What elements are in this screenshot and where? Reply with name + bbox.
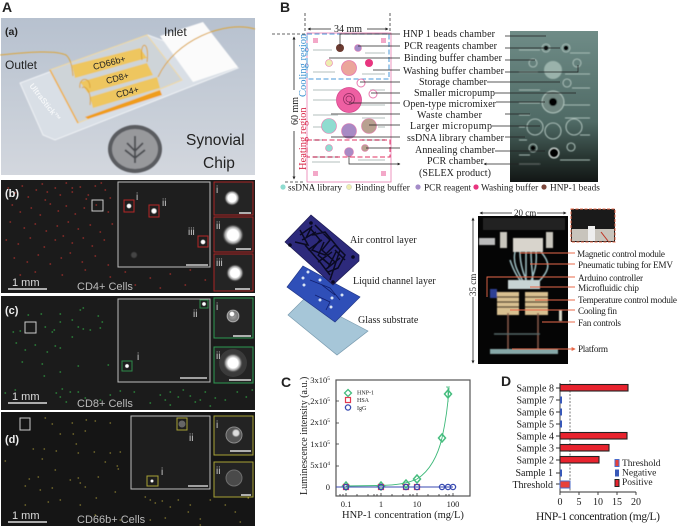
labels: inset callouts: ii <box>193 309 197 320</box>
panel: chip schematic <box>272 13 400 182</box>
label: (d): (d) <box>5 434 19 446</box>
labels: chamber names: Washing buffer chamber <box>403 66 505 77</box>
leader arrows to photo <box>484 36 578 164</box>
scale bar: 1 mm: 1 mm <box>12 510 40 522</box>
labels: chamber names <box>403 29 505 179</box>
dimension: 20 cm <box>480 208 566 218</box>
label: (b): (b) <box>5 188 19 200</box>
labels: chamber names: Storage chamber <box>419 77 488 88</box>
chart: luminescence intensity vs concentration <box>299 375 470 521</box>
labels: inset callouts: iii <box>188 227 195 238</box>
labels: inset callouts: ii <box>189 433 193 444</box>
panel label: D: D <box>501 373 511 389</box>
x tick labels: 0 <box>558 497 562 508</box>
legend: reagents: ssDNA library <box>288 184 342 194</box>
labels: chamber names: PCR chamber <box>427 156 485 167</box>
row labels: Sample 4 <box>516 432 554 442</box>
legend: IgG <box>357 406 367 412</box>
x axis tick labels: 10 <box>413 499 421 509</box>
dimension: 35 cm: 35 cm <box>468 274 478 296</box>
label: Synovial Chip: Chip <box>203 155 235 172</box>
dimension: 34 mm: 34 mm <box>334 24 362 35</box>
legend: HSA <box>357 398 370 404</box>
row labels <box>512 384 554 491</box>
labels: inset callouts: ii <box>216 221 220 232</box>
label: (c): (c) <box>5 305 19 317</box>
legend: reagents: Washing buffer <box>481 182 539 194</box>
labels: inset callouts: ii <box>216 351 220 362</box>
panel: (b) CD4+ cells micrograph <box>1 180 255 293</box>
y axis tick labels: 5 <box>327 376 330 382</box>
labels: inset callouts: i <box>216 302 218 313</box>
region label: Heating region: Heating region <box>298 107 309 170</box>
y axis tick labels: 0 <box>326 482 330 492</box>
y axis tick labels: 4 <box>327 461 330 467</box>
labels: instrument modules <box>577 249 677 354</box>
x tick labels: 10 <box>593 497 603 508</box>
y axis tick labels <box>310 375 330 492</box>
labels: chamber names: Open-type micromixer <box>403 99 497 110</box>
y axis tick labels: 5 <box>327 397 330 403</box>
label: Synovial Chip: Synovial <box>186 132 245 149</box>
panel label: C: C <box>281 374 291 390</box>
y axis tick labels: 1x10 <box>310 439 327 449</box>
legend: HNP-1 <box>357 390 374 396</box>
labels: instrument modules: Magnetic control module <box>577 249 665 259</box>
legend <box>344 390 374 412</box>
label: Glass substrate: Glass substrate <box>358 315 419 326</box>
diagram: exploded chip layers <box>285 215 368 355</box>
labels: chamber names: Annealing chamber <box>415 145 496 156</box>
y axis tick labels: 3x10 <box>310 375 327 385</box>
labels: chamber names: ssDNA library chamber <box>407 133 505 144</box>
row labels: Sample 1 <box>516 468 553 479</box>
chip label: CD8+: CD8+ <box>105 70 130 86</box>
legend: Positive <box>622 478 653 488</box>
labels: instrument modules: Pneumatic tubing for EMV <box>578 260 673 270</box>
label: Liquid channel layer: Liquid channel layer <box>353 276 436 287</box>
legend: Threshold <box>622 459 661 469</box>
dimension: 60 mm: 60 mm <box>290 97 301 125</box>
labels: instrument modules: Arduino controller <box>578 273 643 283</box>
labels: inset callouts: i <box>216 185 218 196</box>
labels: instrument modules: Temperature control module <box>578 295 677 305</box>
labels: instrument modules: Cooling fin <box>578 306 617 316</box>
y axis tick labels: 5x10 <box>310 460 327 470</box>
labels: chamber names: Smaller micropump <box>414 88 495 99</box>
inset photo: chip detail <box>571 209 615 242</box>
legend: reagents: HNP-1 beads <box>550 184 600 194</box>
labels: chamber names: Binding buffer chamber <box>404 53 503 64</box>
labels: chamber names: (SELEX product) <box>419 168 491 179</box>
x tick labels <box>558 497 641 508</box>
labels: inset callouts: iii <box>216 258 223 269</box>
legend: reagents <box>280 182 600 194</box>
chip label: CD4+: CD4+ <box>115 84 140 100</box>
legend <box>615 459 661 488</box>
labels: instrument modules: Microfluidic chip <box>578 283 639 293</box>
legend: reagents: Binding buffer <box>355 182 411 194</box>
x axis tick labels <box>341 499 459 509</box>
region label: Cooling region: Cooling region <box>298 33 309 97</box>
labels: inset callouts: ii <box>162 198 166 209</box>
axis title: y: Luminescence intensity (a.u.) <box>299 377 310 495</box>
labels: inset callouts: i <box>136 192 138 203</box>
label: Inlet: Inlet <box>164 25 187 39</box>
label: CD66b+ Cells: CD66b+ Cells <box>77 514 146 526</box>
labels: chamber names: PCR reagents chamber <box>404 41 498 52</box>
labels: inset callouts: i <box>137 352 139 363</box>
photo: instrument setup <box>478 216 568 364</box>
legend: Negative <box>622 468 656 478</box>
labels: inset callouts: ii <box>216 466 220 477</box>
panel: (c) CD8+ cells micrograph <box>1 296 255 410</box>
labels: chamber names: HNP 1 beads chamber <box>403 29 496 40</box>
x axis tick labels: 100 <box>447 499 459 509</box>
y axis tick labels: 2x10 <box>310 417 327 427</box>
labels: inset callouts: i <box>216 420 218 431</box>
row labels: Sample 7 <box>516 396 554 406</box>
scale bar: 1 mm: 1 mm <box>12 277 40 289</box>
y axis tick labels: 5 <box>327 440 330 446</box>
row labels: Sample 5 <box>516 420 554 430</box>
scale bar: 1 mm: 1 mm <box>12 391 40 403</box>
label: (a): (a) <box>5 26 18 38</box>
x tick labels: 15 <box>612 497 622 508</box>
y axis tick labels: 2x10 <box>310 396 327 406</box>
chip label: CD66b+: CD66b+ <box>92 54 127 72</box>
labels: inset callouts: i <box>161 467 163 478</box>
x axis tick labels: 0.1 <box>341 499 351 509</box>
panel: (a) synovial chip photo <box>0 18 255 175</box>
axis title: HNP-1 concentration (mg/L) <box>536 511 660 523</box>
chart: HNP-1 concentration by sample <box>512 380 661 523</box>
chip label: UltraStick: UltraStick™ <box>27 82 62 123</box>
leader arrows: instrument <box>487 253 575 349</box>
labels: instrument modules: Platform <box>578 344 608 354</box>
y axis tick labels: 5 <box>327 418 330 424</box>
row labels: Sample 8 <box>516 384 554 394</box>
photo: fabricated chip <box>510 31 598 182</box>
x tick labels: 5 <box>576 497 582 508</box>
label: CD4+ Cells: CD4+ Cells <box>77 281 133 293</box>
row labels: Sample 2 <box>516 456 554 466</box>
label: CD8+ Cells: CD8+ Cells <box>77 398 133 410</box>
dimension: 20 cm: 20 cm <box>514 208 536 218</box>
row labels: Sample 3 <box>516 444 554 454</box>
chambers <box>322 44 377 156</box>
labels: chamber names: Larger micropump <box>410 121 492 132</box>
x tick labels: 20 <box>631 497 641 508</box>
x axis tick labels: 1 <box>379 499 383 509</box>
axis title: x: HNP-1 concentration (mg/L) <box>342 510 464 521</box>
leader arrows <box>329 34 400 164</box>
labels: chamber names: Waste chamber <box>417 110 483 121</box>
label: Air control layer: Air control layer <box>350 235 417 246</box>
label: Outlet: Outlet <box>5 58 38 72</box>
row labels: Sample 6 <box>516 408 554 418</box>
labels: instrument modules: Fan controls <box>578 318 621 328</box>
panel: (d) CD66b+ cells micrograph <box>1 412 255 526</box>
row labels: Threshold <box>512 480 553 491</box>
legend: reagents: PCR reagent <box>424 184 472 194</box>
dimension: 34 mm <box>308 24 388 35</box>
